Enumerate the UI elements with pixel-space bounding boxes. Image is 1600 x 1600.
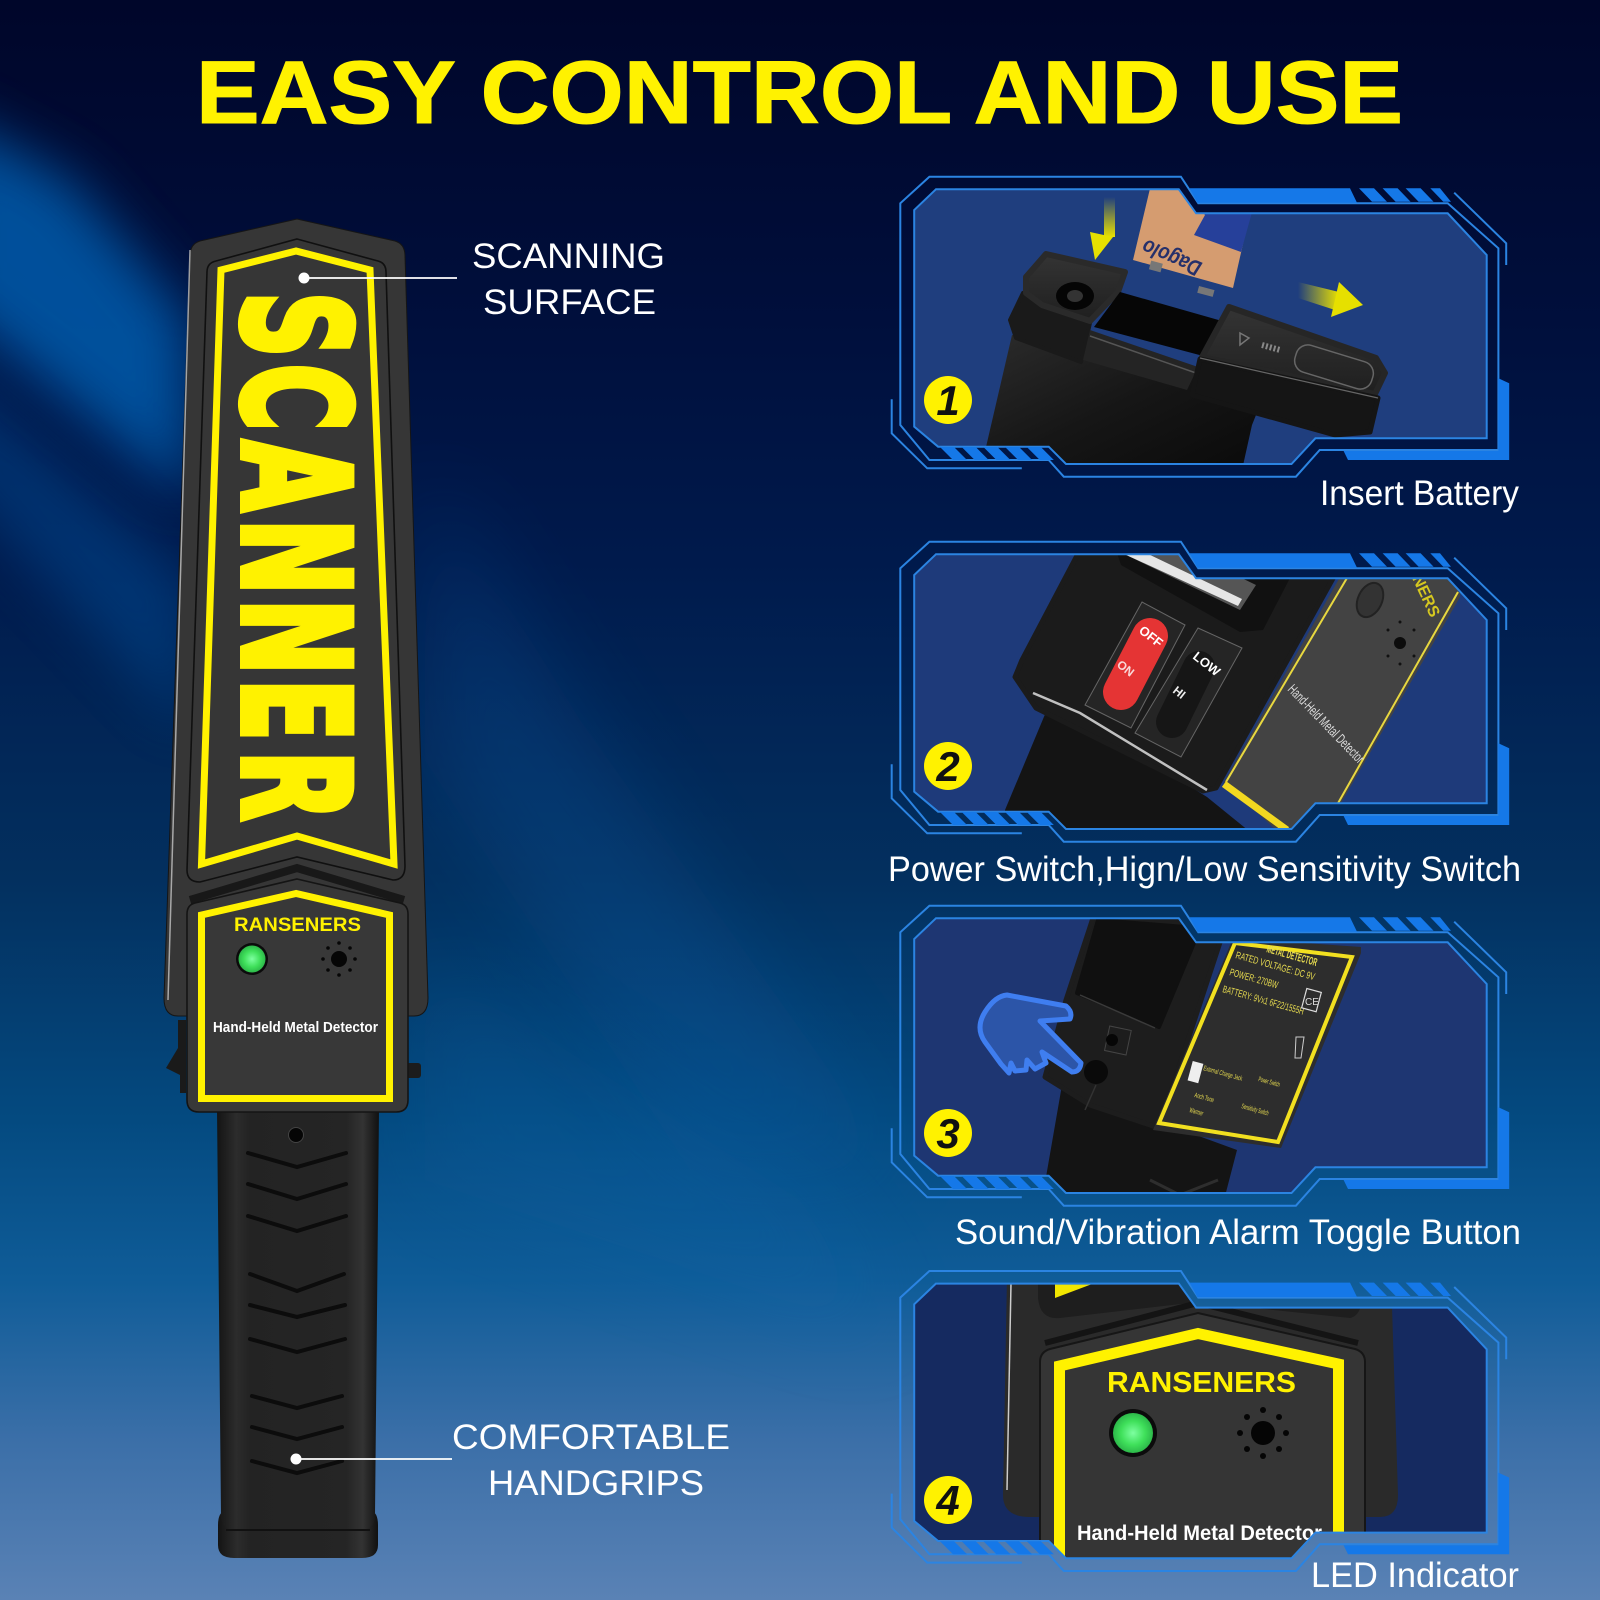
- rating label plate: RATED VOLTAGE: DC 9V: [1234, 950, 1316, 983]
- caption: Insert Battery: [1320, 474, 1519, 513]
- control panel close-up photo: [1003, 1275, 1398, 1570]
- device body: [986, 335, 1262, 470]
- sensitivity switch: [1135, 628, 1242, 757]
- alarm toggle button: [1084, 1060, 1108, 1084]
- metal detector wand: [164, 219, 428, 1558]
- rating label plate: BATTERY: 9Vx1 6F22/1555H: [1221, 984, 1305, 1018]
- step number 4: 4: [935, 1477, 960, 1524]
- device side photo: [1045, 915, 1361, 1200]
- SCANNER lettering: SCANNER: [209, 292, 380, 820]
- handle base: [218, 1510, 378, 1558]
- callout: comfortable handgrips: HANDGRIPS: [488, 1464, 704, 1503]
- step number 4: [924, 1476, 972, 1524]
- step number 1: [924, 376, 972, 424]
- rating label plate: POWER: 270BW: [1228, 967, 1280, 992]
- speaker holes: [1237, 1407, 1289, 1459]
- background light rays: [0, 110, 900, 1340]
- casing: [1015, 548, 1350, 791]
- icon: 9V battery: Dagolo: [1138, 234, 1205, 281]
- panel 2: power and sensitivity switches: [888, 542, 1521, 889]
- switch housing photo: OFF: [1136, 623, 1166, 650]
- right side button: [405, 1063, 421, 1078]
- title: EASY CONTROL AND USE: [196, 42, 1403, 142]
- step number 2: [924, 742, 972, 790]
- control panel: [187, 879, 408, 1112]
- label plate: [1224, 570, 1462, 840]
- battery compartment photo: [986, 186, 1385, 470]
- switch housing photo: LOW: [1190, 649, 1224, 679]
- rating label plate: [1153, 938, 1361, 1148]
- panel 1: insert battery: [892, 177, 1519, 513]
- caption: LED Indicator: [1311, 1556, 1519, 1595]
- product name: Hand-Held Metal Detector: [1077, 1522, 1322, 1545]
- callout: scanning surface: SURFACE: [483, 283, 656, 322]
- handle: [1005, 715, 1246, 828]
- rating label plate: Sensitivity Switch: [1240, 1103, 1269, 1118]
- caption: Sound/Vibration Alarm Toggle Button: [955, 1213, 1521, 1252]
- power switch: [1085, 602, 1185, 728]
- frame outline: [892, 542, 1509, 842]
- callout: scanning surface: [298, 237, 665, 322]
- rating label plate: Anch Tone: [1193, 1092, 1215, 1104]
- step number 3: [924, 1109, 972, 1157]
- left side switch: [166, 1020, 186, 1093]
- panel 3: alarm toggle button: [892, 906, 1521, 1252]
- icon: pointing hand: [980, 995, 1081, 1073]
- green LED: [1109, 1409, 1157, 1457]
- callout: comfortable handgrips: [290, 1418, 730, 1503]
- switch housing photo: HI: [1170, 683, 1188, 702]
- brand name: RANSENERS: [1107, 1367, 1296, 1399]
- step number 1: 1: [936, 377, 960, 424]
- panel 4: LED indicator: [892, 1271, 1519, 1595]
- rating label plate: External Charge Jack: [1202, 1065, 1243, 1083]
- icon: right arrow: [1298, 282, 1363, 317]
- rating label plate: Warmer: [1188, 1107, 1204, 1118]
- callout: scanning surface: SCANNING: [472, 237, 665, 276]
- callout: comfortable handgrips: COMFORTABLE: [452, 1418, 730, 1457]
- frame outline: [892, 177, 1509, 477]
- handle grip: [217, 1108, 379, 1530]
- panel lower shadow band: [190, 868, 404, 900]
- rating label plate: CE: [1305, 997, 1319, 1008]
- switch housing photo: Hand-Held Metal Detector: [1285, 681, 1368, 766]
- frame outline: [892, 906, 1509, 1206]
- top cap: [1116, 550, 1290, 632]
- switch housing photo: [1005, 548, 1462, 840]
- grip chevrons: [248, 1153, 346, 1473]
- caption: Power Switch,Hign/Low Sensitivity Switch: [888, 850, 1521, 889]
- switch housing photo: ON: [1114, 657, 1137, 679]
- icon: down arrow: [1090, 197, 1115, 260]
- step number 2: 2: [935, 743, 960, 790]
- scanning surface panel: [187, 239, 405, 882]
- rating label plate: Power Switch: [1257, 1076, 1281, 1089]
- frame outline: [892, 1271, 1509, 1571]
- switch housing photo: NERS: [1408, 573, 1443, 620]
- detector head: [164, 219, 428, 1016]
- yellow border: [202, 251, 394, 864]
- product name: Hand-Held Metal Detector: [213, 1020, 378, 1036]
- icon: 9V battery: [1133, 186, 1254, 297]
- brand name: RANSENERS: [234, 915, 361, 936]
- rating label plate: METAL DETECTOR: [1265, 943, 1319, 969]
- step number 3: 3: [936, 1110, 960, 1157]
- speaker holes: [321, 941, 357, 977]
- green LED: [236, 943, 268, 975]
